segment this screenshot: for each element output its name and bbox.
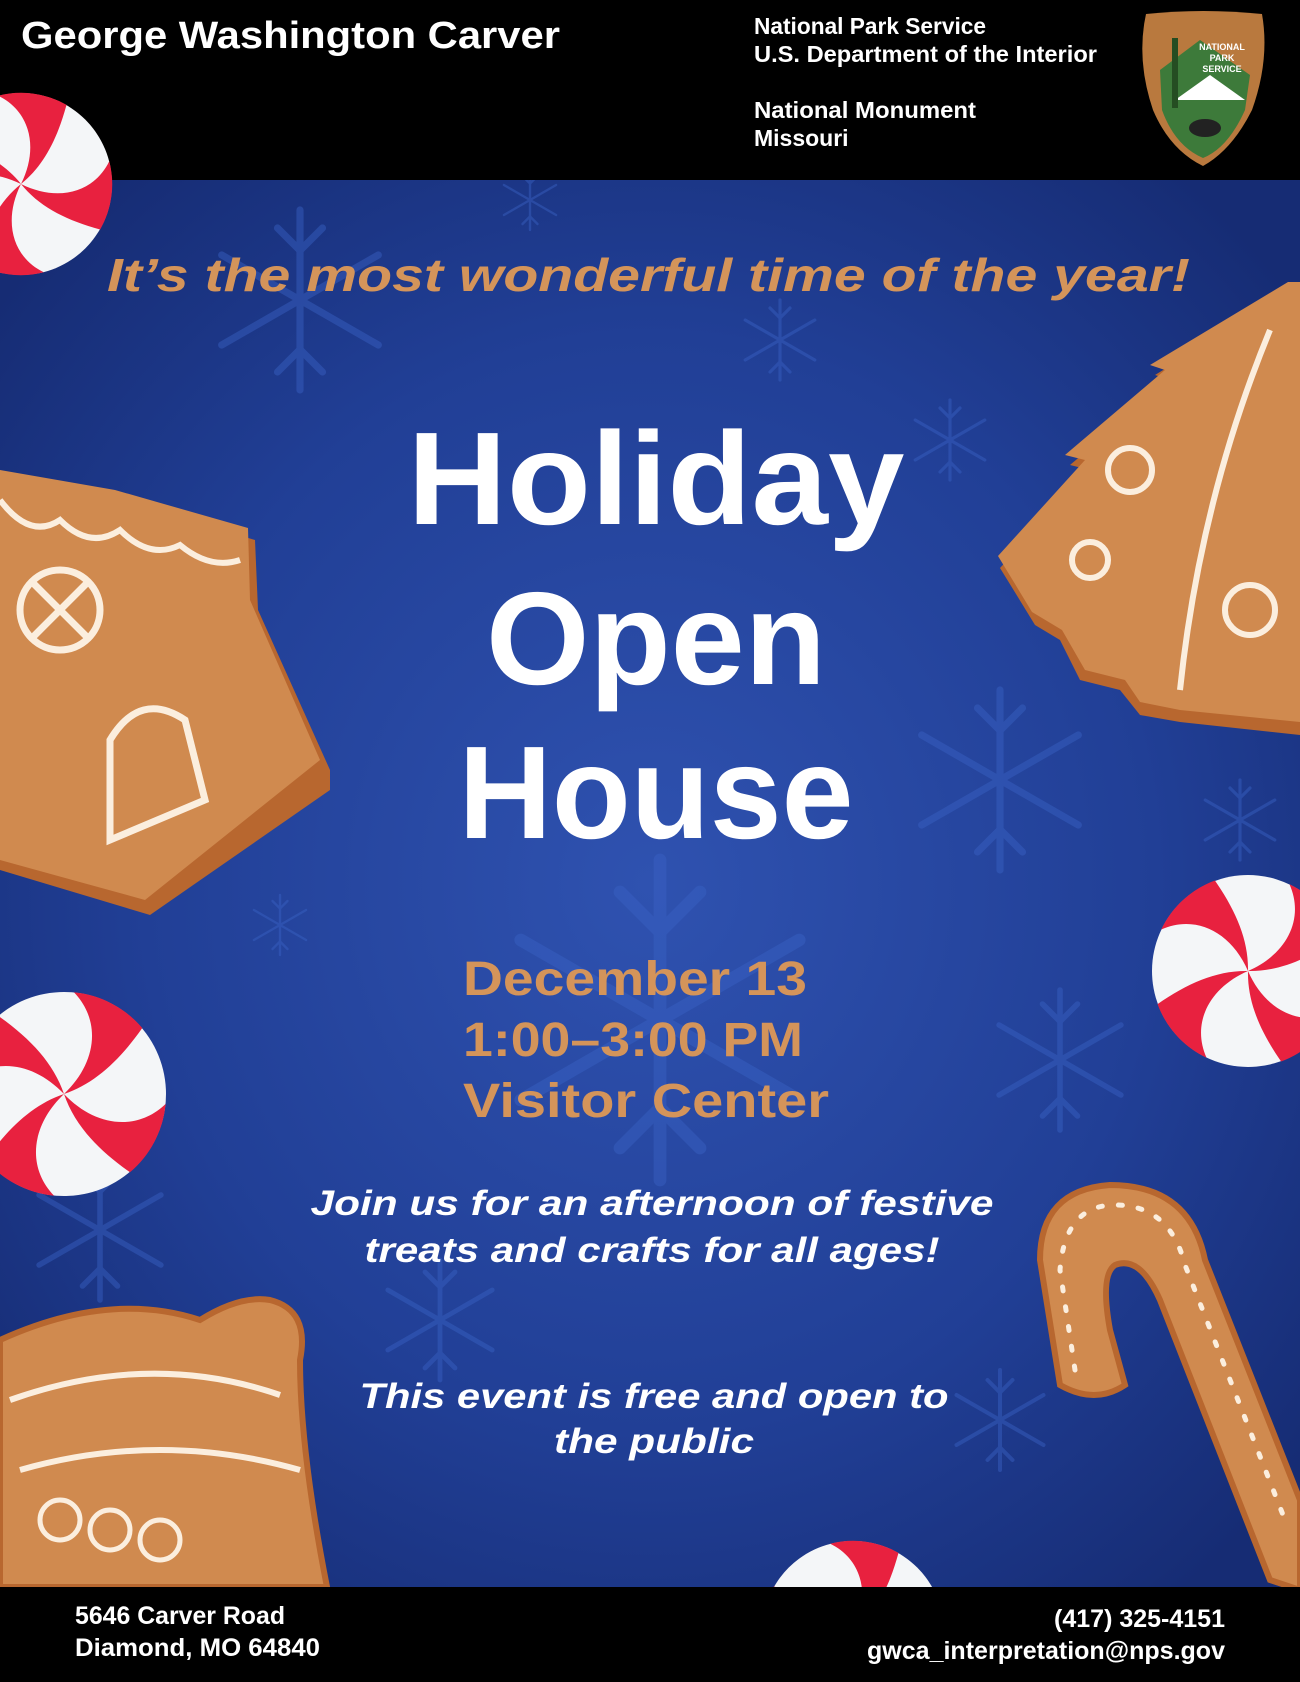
description: Join us for an afternoon of festive xyxy=(310,1184,994,1223)
icon: NPS arrowhead: SERVICE xyxy=(1202,64,1242,74)
agency text: National Monument xyxy=(754,97,976,123)
park name: George Washington Carver xyxy=(21,15,560,57)
title: Holiday xyxy=(408,405,904,552)
description: treats and crafts for all ages! xyxy=(364,1231,940,1270)
contact: gwca_interpretation@nps.gov xyxy=(867,1637,1225,1665)
agency text: U.S. Department of the Interior xyxy=(754,41,1097,67)
peppermint left xyxy=(0,963,195,1225)
cookie: candy cane xyxy=(1040,1185,1300,1590)
cookie: gingerbread house xyxy=(0,470,330,915)
peppermint top-left xyxy=(0,93,112,275)
address: Diamond, MO 64840 xyxy=(75,1634,320,1662)
free notice: This event is free and open to xyxy=(360,1377,948,1416)
event details xyxy=(463,953,829,1128)
description xyxy=(310,1184,994,1270)
free notice xyxy=(360,1377,948,1461)
contact xyxy=(867,1605,1225,1665)
agency text: Missouri xyxy=(754,125,849,151)
icon: NPS arrowhead: PARK xyxy=(1210,53,1235,63)
cookie: bell xyxy=(0,1299,327,1587)
agency text: National Park Service xyxy=(754,13,986,39)
address xyxy=(75,1602,320,1662)
icon: NPS arrowhead xyxy=(1142,11,1264,166)
agency text xyxy=(754,13,1097,151)
cookie: gingerbread tree xyxy=(998,282,1300,735)
address: 5646 Carver Road xyxy=(75,1602,285,1630)
peppermint right xyxy=(1112,835,1300,1107)
title xyxy=(408,405,904,866)
peppermint bottom xyxy=(762,1541,944,1682)
free notice: the public xyxy=(554,1422,754,1461)
event details: Visitor Center xyxy=(463,1075,829,1128)
footer bar xyxy=(0,1587,1300,1682)
event details: December 13 xyxy=(463,953,807,1006)
tagline: It’s the most wonderful time of the year! xyxy=(107,249,1190,301)
event details: 1:00–3:00 PM xyxy=(463,1014,803,1067)
contact: (417) 325-4151 xyxy=(1054,1605,1225,1633)
title: Open xyxy=(486,565,826,712)
header bar xyxy=(0,0,1300,180)
icon: NPS arrowhead: NATIONAL xyxy=(1199,42,1245,52)
title: House xyxy=(458,719,854,866)
